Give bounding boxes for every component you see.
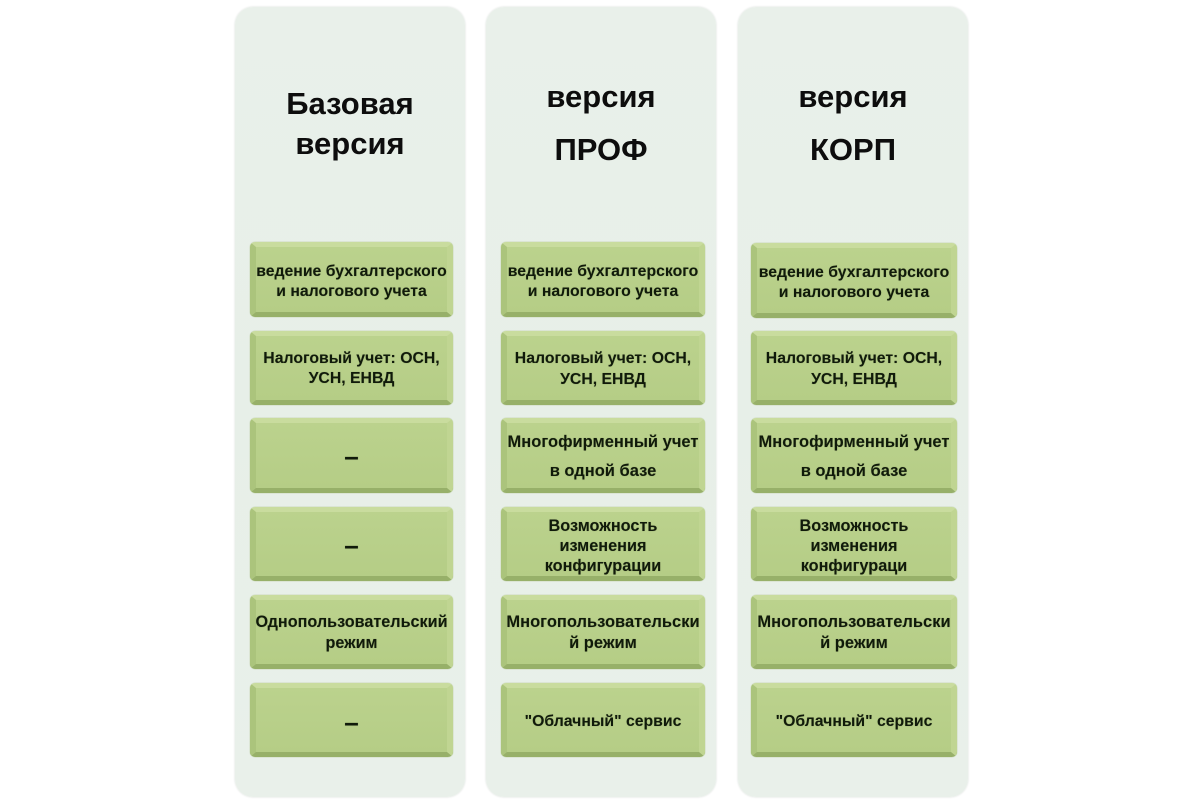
text: налоговый учет: УСН, ЕНВД <box>309 370 394 387</box>
text: многофирменный учет: Многофирменный учет <box>508 433 698 451</box>
box: ПРОФ, многопользовательский режим <box>501 595 705 669</box>
heading: Базовая версия: Базовая <box>286 86 414 121</box>
box: базовая, прочерк 1 <box>250 418 453 493</box>
text: многопользовательский режим: й режим <box>569 634 637 652</box>
heading: версия КОРП: КОРП <box>810 132 896 167</box>
text: ведение учета: и налогового учета <box>779 284 929 301</box>
box: ПРОФ, учет <box>501 242 705 317</box>
text: налоговый учет: Налоговый учет: ОСН, <box>766 350 942 367</box>
text: многофирменный учет: в одной базе <box>801 462 907 480</box>
text: прочерк: – <box>344 530 359 560</box>
text: ведение учета <box>508 263 698 300</box>
text: налоговый учет: Налоговый учет: ОСН, <box>263 350 440 367</box>
text: ведение учета: и налогового учета <box>528 283 678 300</box>
panel: версия КОРП <box>738 7 968 797</box>
box: КОРП, учет <box>751 243 957 318</box>
text: ведение учета: ведение бухгалтерского <box>759 264 949 281</box>
box: ПРОФ, многофирменный учет <box>501 418 705 493</box>
box: КОРП, облачный сервис <box>751 683 957 757</box>
box: КОРП, изменение конфигурации <box>751 507 957 581</box>
heading: версия ПРОФ: ПРОФ <box>554 132 648 167</box>
text: изменение конфигурации <box>800 517 908 575</box>
text: однопользовательский режим <box>255 613 448 652</box>
heading: версия ПРОФ: версия <box>546 79 656 114</box>
text: ведение учета: ведение бухгалтерского <box>256 263 447 280</box>
text: многофирменный учет: в одной базе <box>550 462 656 480</box>
text: изменение конфигурации <box>545 517 661 575</box>
text: изменение конфигурации: изменения <box>810 537 898 555</box>
text: многофирменный учет <box>759 433 950 480</box>
text: ведение учета <box>759 264 949 301</box>
panel: версия ПРОФ <box>486 7 716 797</box>
text: ведение учета: ведение бухгалтерского <box>508 263 698 280</box>
text: однопользовательский режим: Однопользовательский <box>255 613 448 631</box>
box: базовая, налоговый учет <box>250 331 453 405</box>
text: ведение учета <box>256 263 447 300</box>
text: многопользовательский режим: Многопользовательски <box>757 613 951 631</box>
box: базовая, прочерк 2 <box>250 507 453 581</box>
text: многофирменный учет: Многофирменный учет <box>759 433 949 451</box>
box: базовая, однопользовательский режим <box>250 595 453 669</box>
heading: версия КОРП <box>798 79 908 167</box>
box: базовая, прочерк 3 <box>250 683 453 757</box>
text: облачный сервис: "Облачный" сервис <box>525 713 681 730</box>
text: прочерк: – <box>344 441 359 471</box>
text: прочерк: – <box>344 707 359 737</box>
box: ПРОФ, изменение конфигурации <box>501 507 705 581</box>
text: ведение учета: и налогового учета <box>276 283 427 300</box>
box: ПРОФ, облачный сервис <box>501 683 705 757</box>
text: налоговый учет <box>263 350 440 387</box>
text: изменение конфигурации: Возможность <box>549 517 657 535</box>
text: изменение конфигурации: конфигурации <box>545 557 661 575</box>
text: налоговый учет <box>766 350 942 388</box>
text: многопользовательский режим: й режим <box>820 634 888 652</box>
box: ПРОФ, налоговый учет <box>501 331 705 405</box>
text: изменение конфигурации: Возможность <box>800 517 908 535</box>
text: многопользовательский режим <box>506 613 700 652</box>
heading: версия ПРОФ <box>546 79 656 167</box>
text: однопользовательский режим: режим <box>325 634 378 652</box>
text: облачный сервис: "Облачный" сервис <box>776 713 932 730</box>
heading: Базовая версия: версия <box>295 126 405 161</box>
text: многопользовательский режим: Многопользовательски <box>506 613 700 631</box>
box: КОРП, налоговый учет <box>751 331 957 405</box>
box: КОРП, многофирменный учет <box>751 418 957 493</box>
text: налоговый учет <box>515 350 691 388</box>
panel: Базовая версия <box>235 7 465 797</box>
text: изменение конфигурации: изменения <box>559 537 647 555</box>
heading: версия КОРП: версия <box>798 79 908 114</box>
text: многопользовательский режим <box>757 613 951 652</box>
text: многофирменный учет <box>508 433 698 480</box>
text: налоговый учет: УСН, ЕНВД <box>560 371 646 388</box>
box: базовая, учет <box>250 242 453 317</box>
heading: Базовая версия <box>286 86 414 161</box>
text: налоговый учет: УСН, ЕНВД <box>811 371 897 388</box>
text: налоговый учет: Налоговый учет: ОСН, <box>515 350 691 367</box>
box: КОРП, многопользовательский режим <box>751 595 957 669</box>
text: изменение конфигурации: конфигураци <box>801 557 907 575</box>
